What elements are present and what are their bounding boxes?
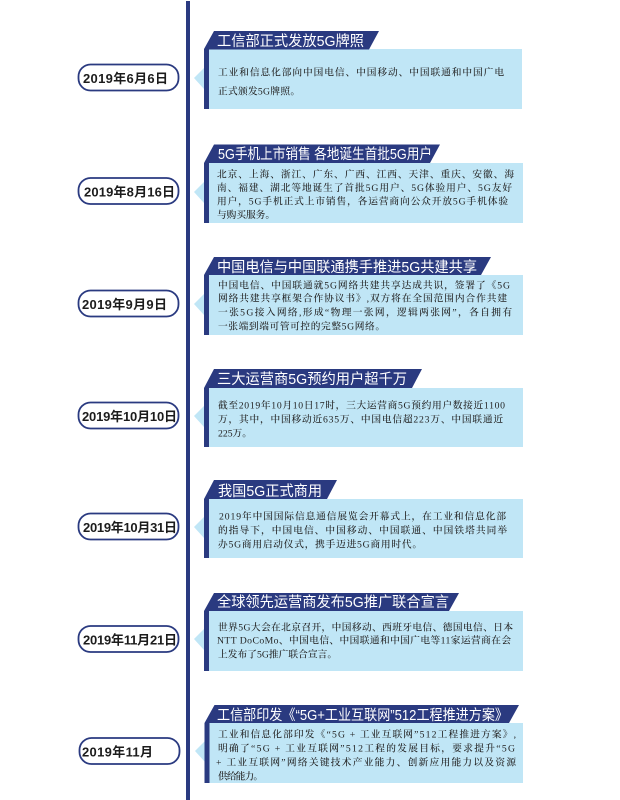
- event 3: [78, 257, 523, 335]
- body text: 办5G商用启动仪式，携手迈进5G商用时代。: [218, 538, 422, 550]
- pointer arrow: [194, 406, 204, 427]
- text panel: [204, 723, 523, 783]
- body text: [217, 168, 514, 221]
- body text: [218, 66, 504, 98]
- header ribbon: 我国5G正式商用: [218, 483, 322, 500]
- text panel: [204, 611, 523, 671]
- pointer arrow: [194, 517, 204, 538]
- body text: 万，其中，中国移动近635万、中国电信超223万、中国联通近: [218, 412, 503, 426]
- date pill: [78, 626, 178, 652]
- body text: 明确了“5G + 工业互联网”512工程的发展目标，要求提升“5G: [218, 742, 515, 754]
- date pill: [78, 64, 178, 90]
- date pill: 2019年11月: [82, 744, 153, 760]
- header ribbon: 5G手机上市销售 各地诞生首批5G用户: [218, 146, 432, 163]
- text panel: [204, 388, 523, 447]
- text panel: [204, 49, 522, 109]
- body text: 工业和信息化部印发《“5G + 工业互联网”512工程推进方案》,: [218, 728, 516, 740]
- date pill: [80, 738, 180, 764]
- date pill: [78, 178, 178, 204]
- body text: 中国电信、中国联通就5G网络共建共享达成共识，签署了《5G: [218, 278, 510, 292]
- body text: 225万。: [218, 428, 252, 440]
- date pill: [78, 290, 178, 316]
- date pill: 2019年10月31日: [83, 520, 177, 535]
- header ribbon: 工信部印发《“5G+工业互联网”512工程推进方案》: [217, 706, 508, 724]
- body text: [217, 620, 513, 660]
- pointer arrow: [194, 68, 204, 89]
- header ribbon: [204, 369, 422, 447]
- date pill: 2019年8月16日: [84, 184, 175, 200]
- body text: 一张端到端可管可控的完整5G网络。: [218, 320, 385, 332]
- text panel: [204, 163, 523, 223]
- date pill: 2019年6月6日: [83, 71, 168, 86]
- header ribbon: 中国电信与中国联通携手推进5G共建共享: [217, 259, 477, 276]
- header ribbon: [204, 257, 491, 335]
- header ribbon: 全球领先运营商发布5G推广联合宣言: [217, 593, 449, 611]
- header ribbon: [204, 480, 337, 558]
- body text: 用户，5G手机正式上市销售，各运营商向公众开放5G手机体验: [217, 194, 508, 208]
- pointer arrow: [194, 182, 204, 203]
- header ribbon: 工信部正式发放5G牌照: [217, 33, 364, 50]
- event 2: [78, 144, 523, 223]
- body text: 世界5G大会在北京召开，中国移动、西班牙电信、德国电信、日本: [218, 620, 513, 634]
- text panel: [204, 275, 523, 335]
- body text: 工业和信息化部向中国电信、中国移动、中国联通和中国广电: [218, 66, 504, 78]
- body text: 2019年中国国际信息通信展览会开幕式上，在工业和信息化部: [219, 510, 506, 522]
- event 7: [80, 705, 523, 783]
- event 1: [78, 31, 522, 109]
- date pill: [78, 402, 178, 428]
- body text: [218, 278, 512, 332]
- header ribbon: 三大运营商5G预约用户超千万: [217, 371, 407, 388]
- date pill: [78, 514, 178, 540]
- event 5: [78, 480, 523, 558]
- pointer arrow: [195, 741, 205, 762]
- body text: 截至2019年10月10日17时，三大运营商5G预约用户数接近1100: [218, 398, 505, 412]
- body text: 一张5G接入网络,形成“物理一张网，逻辑两张网”，各自拥有: [218, 306, 512, 318]
- body text: NTT DoCoMo、中国电信、中国联通和中国广电等11家运营商在会: [217, 634, 511, 646]
- event 6: [78, 593, 523, 671]
- timeline axis: [186, 1, 190, 800]
- body text: [218, 398, 505, 440]
- body text: [218, 510, 507, 550]
- body text: 供给能力。: [218, 770, 263, 782]
- event 4: [78, 369, 523, 447]
- body text: 上发布了5G推广联合宣言。: [218, 648, 337, 660]
- pointer arrow: [194, 294, 204, 315]
- body text: 的指导下，中国电信、中国移动、中国联通、中国铁塔共同举: [218, 524, 507, 536]
- body text: 南、福建、湖北等地诞生了首批5G用户、5G体验用户、5G友好: [217, 181, 512, 194]
- header ribbon: [204, 593, 459, 671]
- date pill: 2019年11月21日: [83, 632, 177, 648]
- body text: 与购买服务。: [217, 208, 275, 221]
- body text: 北京、上海、浙江、广东、广西、江西、天津、重庆、安徽、海: [217, 168, 514, 180]
- header ribbon: [204, 705, 519, 783]
- date pill: 2019年10月10日: [82, 409, 177, 424]
- body text: [216, 728, 516, 782]
- body text: 正式颁发5G牌照。: [218, 84, 300, 98]
- body text: 网络共建共享框架合作协议书》,双方将在全国范围内合作共建: [218, 292, 507, 304]
- text panel: [204, 499, 523, 558]
- pointer arrow: [194, 629, 204, 650]
- date pill: 2019年9月9日: [82, 297, 167, 312]
- body text: + 工业互联网”网络关键技术产业能力、创新应用能力以及资源: [216, 756, 516, 768]
- header ribbon: [204, 31, 379, 109]
- header ribbon: [204, 144, 440, 223]
